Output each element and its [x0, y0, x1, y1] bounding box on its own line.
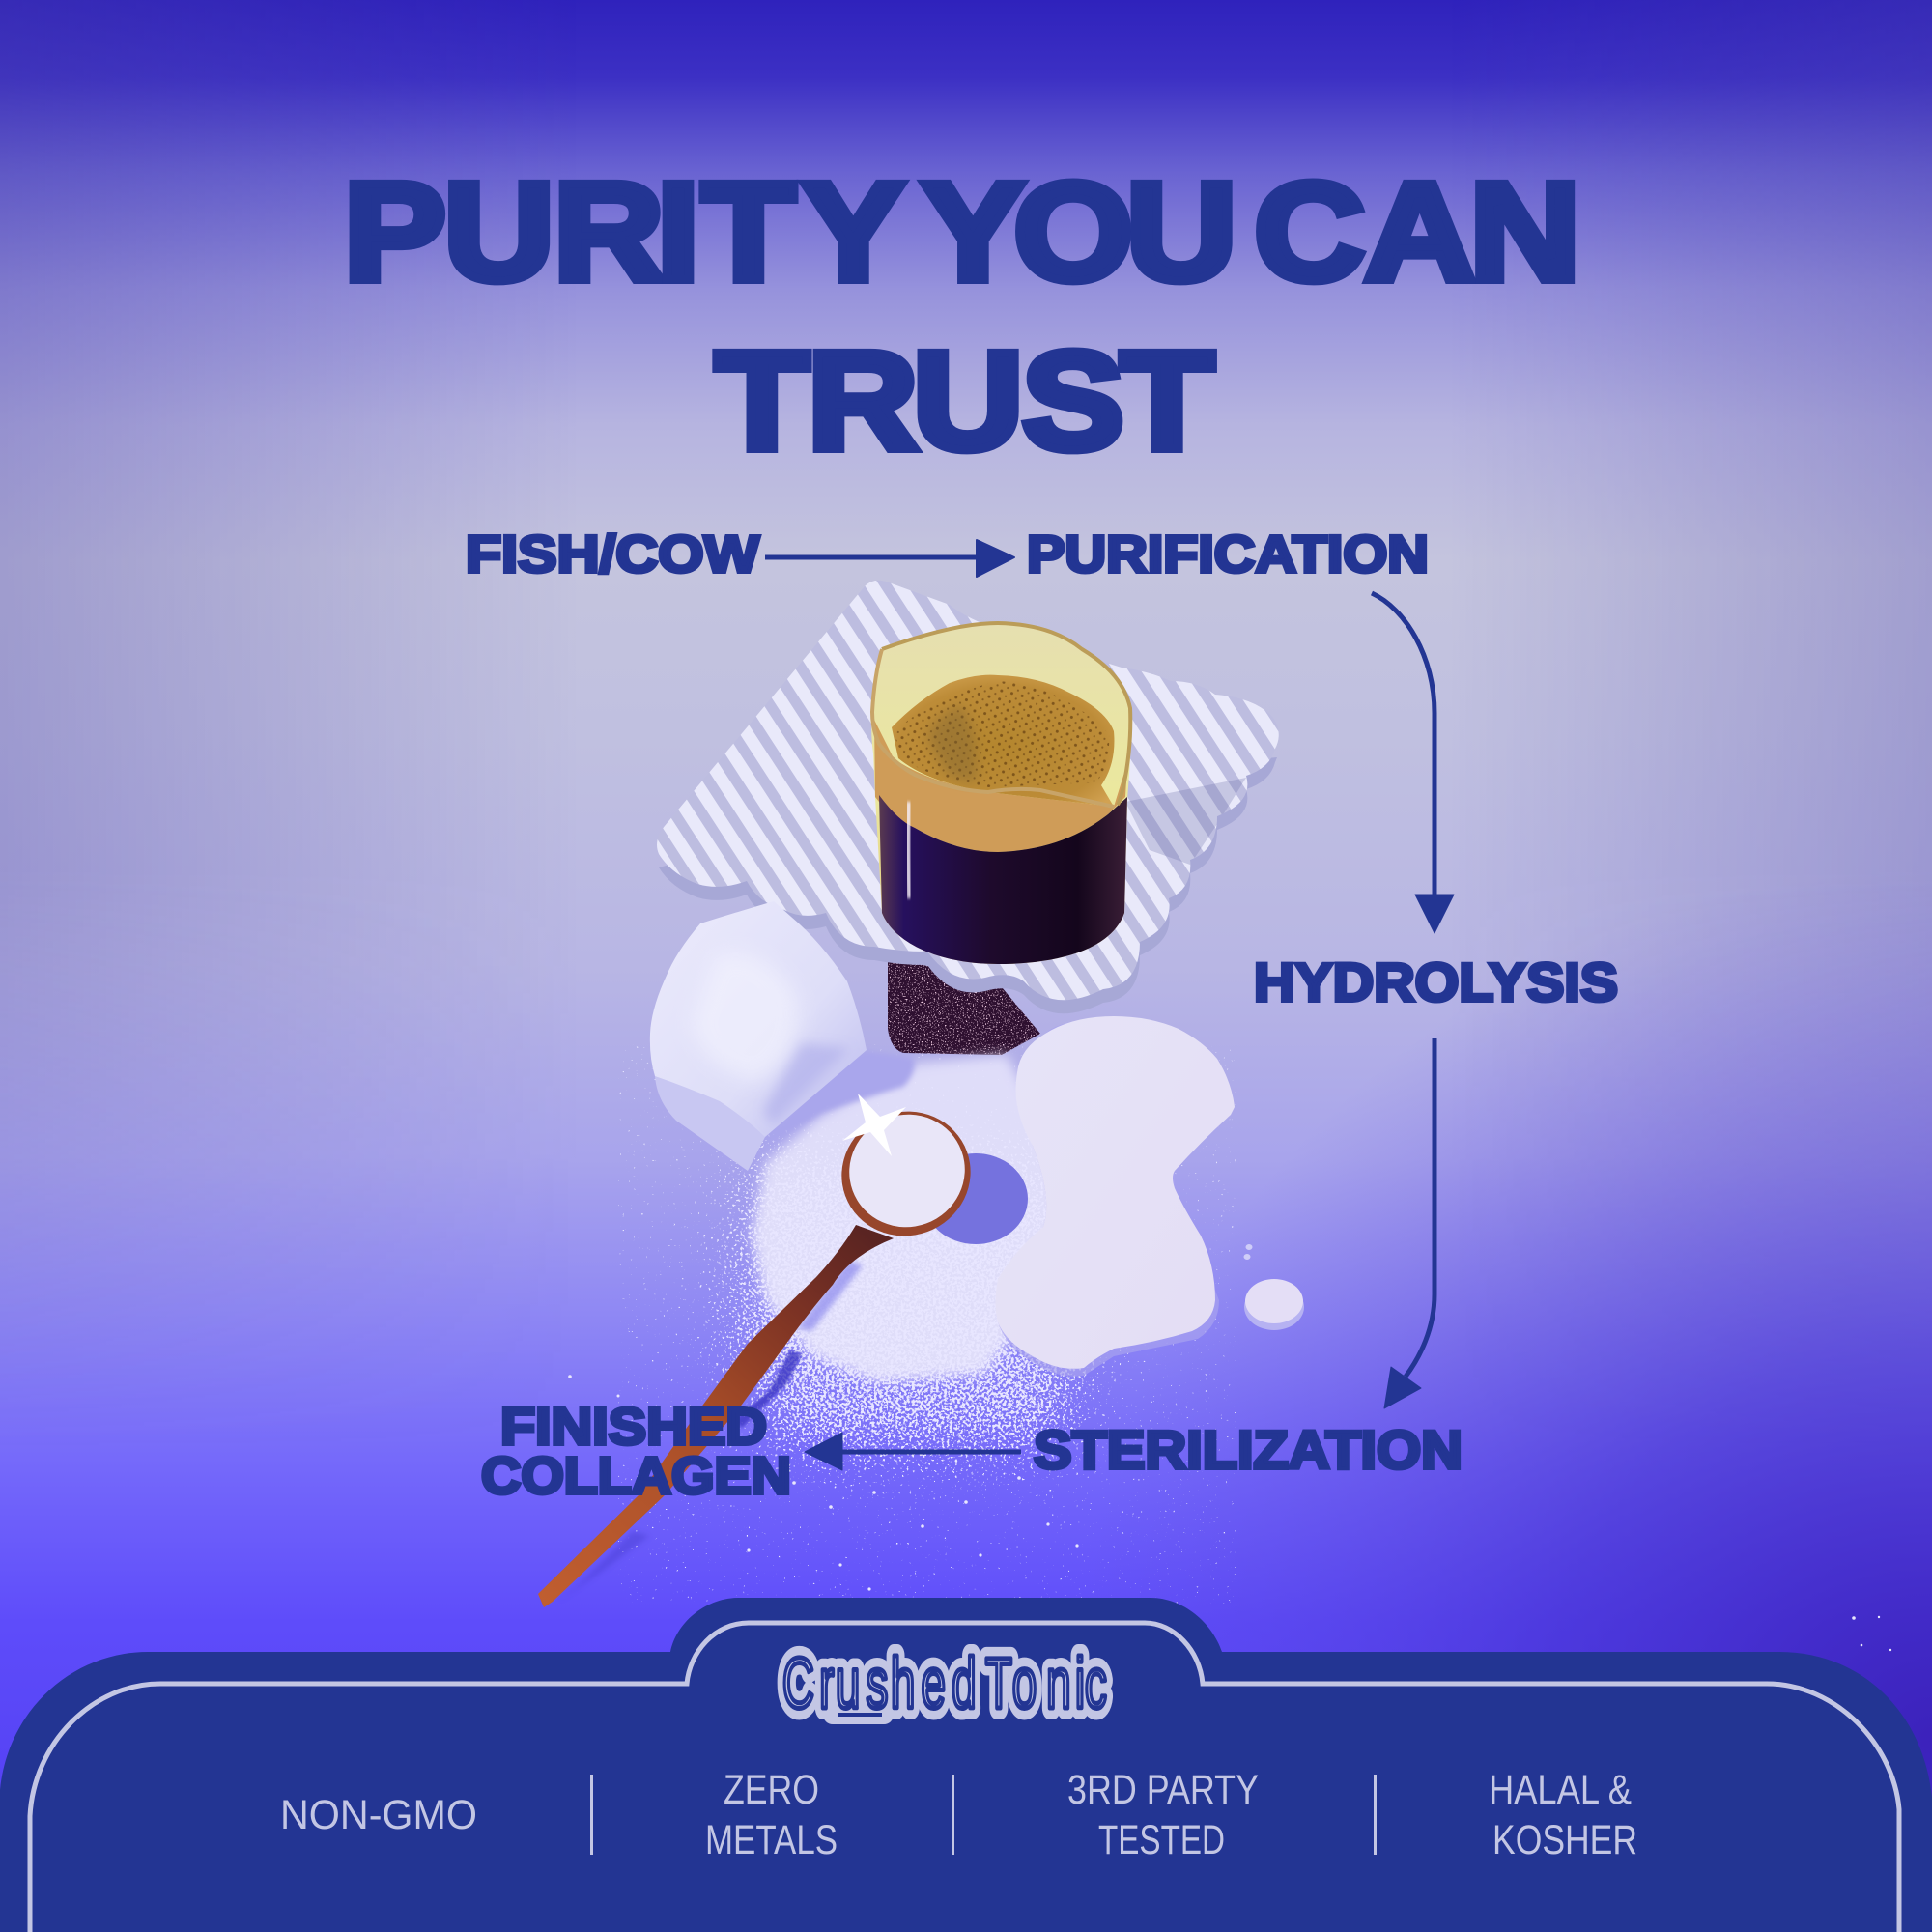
arrow: Hydrolysis to Sterilization — [1384, 1038, 1435, 1408]
step label: Hydrolysis: HYDROLYSIS — [1254, 952, 1618, 1012]
title — [344, 155, 1580, 479]
step label: Finished Collagen: COLLAGEN — [481, 1447, 791, 1505]
divider 3 — [1374, 1775, 1377, 1855]
claim: 3rd Party Tested: TESTED — [1098, 1817, 1225, 1863]
panel shape — [0, 1598, 1932, 1932]
claim: Halal and Kosher: KOSHER — [1492, 1817, 1637, 1863]
claim: Zero Metals: METALS — [705, 1817, 838, 1863]
arrow: Fish/Cow to Purification — [765, 540, 1014, 577]
claim: 3rd Party Tested: 3RD PARTY — [1067, 1767, 1259, 1813]
glass of coffee — [871, 623, 1131, 964]
title: PURITY — [344, 155, 904, 310]
claim: 3rd Party Tested — [1067, 1767, 1259, 1863]
divider 1 — [590, 1775, 593, 1855]
claim: Non-GMO: NON-GMO — [280, 1792, 477, 1838]
title: TRUST — [716, 324, 1214, 479]
cream dollop — [650, 901, 867, 1171]
claim: Zero Metals — [705, 1767, 838, 1863]
step label: Purification: PURIFICATION — [1027, 526, 1429, 583]
arrow: Sterilization to Finished Collagen — [805, 1433, 1021, 1470]
striped scalloped tile — [657, 581, 1279, 1013]
milk puddle — [995, 1016, 1235, 1377]
step label: Finished Collagen — [481, 1398, 791, 1505]
shadow of cream on the surface — [765, 1051, 914, 1146]
product photo: glass, tile, powder and spoon — [538, 570, 1891, 1651]
claim: Zero Metals: ZERO — [724, 1767, 819, 1813]
step label: Fish/Cow: FISH/COW — [466, 526, 759, 583]
reflection below the tile — [888, 956, 1040, 1055]
scattered powder grains — [568, 1375, 1891, 1651]
footer panel — [0, 1598, 1932, 1932]
spoon — [538, 1094, 988, 1607]
powder heap — [724, 1055, 1092, 1459]
title: CAN — [1255, 155, 1580, 310]
divider 2 — [952, 1775, 954, 1855]
step label: Sterilization: STERILIZATION — [1034, 1419, 1463, 1480]
sparkle — [842, 1094, 906, 1156]
tablet and droplets — [1244, 1244, 1304, 1330]
step label: Finished Collagen: FINISHED — [500, 1398, 767, 1456]
title: YOU — [922, 155, 1236, 310]
arrow: Purification to Hydrolysis — [1372, 593, 1454, 933]
claim: Halal and Kosher: HALAL & — [1489, 1767, 1632, 1813]
spoon shadow — [558, 1153, 1028, 1602]
panel inner outline — [30, 1623, 1899, 1932]
logo: Crushed Tonic: CrushedTonic — [782, 1644, 1107, 1724]
claim: Halal and Kosher — [1489, 1767, 1637, 1863]
logo: Crushed Tonic: CrushedTonic — [782, 1644, 1107, 1724]
